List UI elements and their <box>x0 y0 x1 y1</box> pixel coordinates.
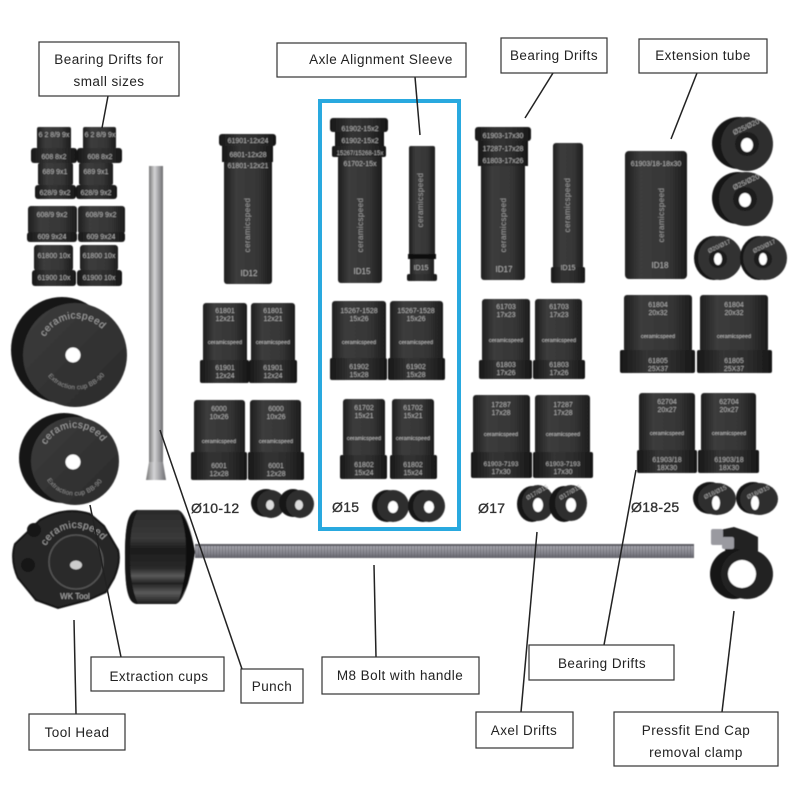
sleeve ID15: 61902-15x2 <box>342 126 379 133</box>
drift 61702 right: 61702 <box>403 405 423 412</box>
drift 61703 left: 61703 <box>496 304 516 311</box>
size label Ø17: Ø17 <box>478 500 505 516</box>
drift 6000 left: 6000 <box>211 406 227 413</box>
drift 61702 left <box>340 399 387 479</box>
small drift row 2 left <box>35 163 76 199</box>
sleeve ID12: ceramicspeed <box>243 198 252 252</box>
drift 62704 right: ceramicspeed <box>712 431 746 437</box>
callout: punch: Punch <box>252 679 292 694</box>
drift 15267 left: 15x28 <box>349 372 369 379</box>
sleeve ID17: ceramicspeed <box>499 198 508 252</box>
leader: axle alignment sleeve <box>415 77 420 135</box>
leader: pressfit clamp <box>722 611 734 712</box>
drift 17287 right: 17x28 <box>553 410 573 417</box>
small drift row 2 right <box>76 163 117 199</box>
small drift row 1 right: 608 8x2 <box>88 154 113 161</box>
drift 61801 left: 61801 <box>215 308 235 315</box>
drift 15267 right: 15x26 <box>406 316 426 323</box>
ring Ø25/Ø20 bottom: Ø25/Ø20 <box>732 173 761 192</box>
small drift row 3 right: 609 9x24 <box>87 234 116 241</box>
drift 61702 left: ceramicspeed <box>347 436 381 442</box>
sleeve ID12 <box>219 134 276 284</box>
drift 61801 right: ceramicspeed <box>256 340 290 346</box>
extension tube: 61903/18-18x30 <box>631 161 681 168</box>
drift 61801 right: 12x24 <box>263 373 283 380</box>
drift 61804 right: 25X37 <box>724 366 744 373</box>
sleeve ID15: 15267/15268-15x <box>337 151 383 157</box>
drift 17287 left: 17x30 <box>491 469 511 476</box>
drift 61804 left: 61804 <box>648 302 668 309</box>
drift 61804 left: 61805 <box>648 358 668 365</box>
drift 62704 right: 61903/18 <box>714 457 744 464</box>
drift 62704 right: 18X30 <box>719 465 739 472</box>
extraction cup large <box>10 296 128 408</box>
small drift row 4 right: 61900 10x <box>83 275 116 282</box>
small drift row 1 left: 6 2 8/9 9x <box>39 132 70 139</box>
drift 15267 right: ceramicspeed <box>399 340 433 346</box>
axle drift rings Ø17: Ø17/Ø15 <box>525 484 550 502</box>
callout: bearing drifts small sizes: small sizes <box>74 74 144 89</box>
leader: m8 bolt <box>374 565 376 657</box>
callout: punch <box>241 669 303 703</box>
callout: tool head: Tool Head <box>45 725 109 740</box>
sleeve ID15: ID15 <box>354 267 371 276</box>
axle drift rings Ø18-25: Ø18/Ø15 <box>746 485 771 501</box>
drift 61804 right: 20x32 <box>724 310 744 317</box>
drift 61801 left: 61901 <box>215 365 235 372</box>
drift 62704 left: 20x27 <box>657 407 677 414</box>
sleeve ID12: 6801-12x28 <box>230 152 267 159</box>
callout: bearing drifts small sizes: Bearing Drifts for <box>54 52 164 67</box>
callout: extraction cups: Extraction cups <box>109 669 209 684</box>
axle alignment sleeve tube <box>407 146 437 281</box>
sleeve ID15: 61702-15x <box>343 161 377 168</box>
drift 61703 right: 17x23 <box>549 312 569 319</box>
drift 61702 right: 15x24 <box>403 470 423 477</box>
small drift row 2 left: 689 9x1 <box>43 169 68 176</box>
sleeve ID15: ceramicspeed <box>356 198 365 252</box>
small drift row 2 right: 689 9x1 <box>84 169 109 176</box>
bolt handle <box>125 510 195 604</box>
drift 15267 right: 61902 <box>406 364 426 371</box>
drift 61703 left: 61803 <box>496 362 516 369</box>
tool head <box>11 503 136 610</box>
size label Ø18-25: Ø18-25 <box>631 499 680 515</box>
punch <box>146 166 166 480</box>
drift 61702 right: ceramicspeed <box>396 436 430 442</box>
spacer rings Ø25/Ø20 and Ø20/Ø17 <box>694 117 787 280</box>
ring Ø20/Ø17 right: Ø20/Ø17 <box>752 239 777 255</box>
drift 61801 right: 61801 <box>263 308 283 315</box>
axle alignment sleeve tube: ceramicspeed <box>416 173 425 227</box>
small drift row 4 left <box>32 245 76 286</box>
small drift row 4 left: 61900 10x <box>38 275 71 282</box>
tool head: WK Tool <box>60 592 90 601</box>
drift 15267 left: ceramicspeed <box>342 340 376 346</box>
drift 17287 right: ceramicspeed <box>546 432 580 438</box>
drift 62704 right: 20x27 <box>719 407 739 414</box>
tool head: ceramicspeed <box>42 520 108 546</box>
drift 15267 right: 15267-1528 <box>397 308 435 315</box>
drift 17287 left <box>471 395 532 478</box>
small drift row 3 right <box>78 206 125 242</box>
small drift row 1 left: 608 8x2 <box>42 154 67 161</box>
drift 61702 left: 15x24 <box>354 470 374 477</box>
callout: axel drifts <box>476 712 573 748</box>
small drift row 4 left: 61800 10x <box>38 253 71 260</box>
leader: extension tube <box>671 73 697 139</box>
drift 61801 right: 61901 <box>263 365 283 372</box>
axle drift rings Ø10-12 <box>251 489 314 518</box>
drift 61702 right: 61802 <box>403 462 423 469</box>
callout: bearing drifts bottom <box>529 645 674 680</box>
drift 61804 right <box>697 295 772 373</box>
drift 17287 right: 61903-7193 <box>546 461 581 468</box>
drift 61702 left: 61802 <box>354 462 374 469</box>
drift 61804 left: 20x32 <box>648 310 668 317</box>
drift 17287 left: 17x28 <box>491 410 511 417</box>
ring Ø25/Ø20 top <box>712 117 773 171</box>
extraction cup large: ceramicspeed <box>40 312 107 336</box>
ring Ø20/Ø17 right <box>740 236 787 280</box>
size label Ø15: Ø15 <box>332 499 359 515</box>
drift 61703 right <box>533 299 585 379</box>
drift 6000 right <box>248 400 304 480</box>
drift 62704 left: 62704 <box>657 399 677 406</box>
drift 15267 left: 15x26 <box>349 316 369 323</box>
small drift row 2 right: 628/9 9x2 <box>81 190 111 197</box>
drift 61804 left <box>620 295 695 373</box>
callout: axle alignment sleeve <box>277 43 466 77</box>
drift 62704 right: 62704 <box>719 399 739 406</box>
small drift row 3 left <box>27 206 77 242</box>
drift 61804 right: ceramicspeed <box>717 334 751 340</box>
small drift row 1 left <box>31 127 77 163</box>
axle alignment sleeve tube: ID15 <box>414 265 428 272</box>
small drift row 4 right: 61800 10x <box>83 253 116 260</box>
drift 6000 right: 6000 <box>268 406 284 413</box>
drift 61801 right <box>249 303 297 383</box>
drift 61804 right: 61804 <box>724 302 744 309</box>
drift 61801 left: ceramicspeed <box>208 340 242 346</box>
drift 15267 right <box>388 301 445 380</box>
small drift row 3 left: 609 9x24 <box>38 234 67 241</box>
small drift row 1 right <box>77 127 122 163</box>
drift 62704 right <box>698 393 759 473</box>
drift 17287 left: 17287 <box>491 402 511 409</box>
small drift row 3 left: 608/9 9x2 <box>37 212 67 219</box>
callout: axle alignment sleeve: Axle Alignment Sleeve <box>309 52 453 67</box>
m8 bolt thread <box>195 544 694 558</box>
axle drift rings Ø15 <box>372 490 445 522</box>
extraction cup small <box>18 412 120 506</box>
small drift row 4 right <box>77 245 122 286</box>
extension tube: ceramicspeed <box>657 188 666 242</box>
drift 61801 left: 12x21 <box>215 316 235 323</box>
drift 6000 left: ceramicspeed <box>202 439 236 445</box>
product illustrations layer <box>10 116 788 610</box>
drift 6000 right: ceramicspeed <box>259 439 293 445</box>
sleeve ID12: 61801-12x21 <box>228 163 269 170</box>
drift 17287 right <box>533 395 593 478</box>
drift 61804 left: ceramicspeed <box>641 334 675 340</box>
drift 61703 left <box>479 299 532 379</box>
drift 6000 right: 10x26 <box>266 414 286 421</box>
highlight frame: Ø15 group <box>320 101 459 529</box>
size label Ø10-12: Ø10-12 <box>191 500 240 516</box>
sleeve ID12: 61901-12x24 <box>228 138 269 145</box>
drift 15267 left: 61902 <box>349 364 369 371</box>
leader: punch <box>160 430 242 669</box>
drift 61703 right: 61703 <box>549 304 569 311</box>
drift 61702 left: 15x21 <box>354 413 374 420</box>
axle drift rings Ø18-25: Ø18/Ø15 <box>703 485 728 501</box>
drift 17287 left: ceramicspeed <box>484 432 518 438</box>
callout: extension tube <box>639 39 767 73</box>
drift 15267 right: 15x28 <box>406 372 426 379</box>
sleeve ID17: 61803-17x26 <box>483 158 524 165</box>
ring Ø25/Ø20 top: Ø25/Ø20 <box>732 118 761 137</box>
leader: axel drifts <box>521 532 537 712</box>
axle drift tube ID17: ceramicspeed <box>563 178 572 232</box>
leader: bearing drifts top <box>525 73 553 118</box>
drift 6000 left: 12x28 <box>209 471 229 478</box>
sleeve ID15: 61902-15x2 <box>342 138 379 145</box>
extraction cup small: ceramicspeed <box>42 420 108 444</box>
callout: m8 bolt <box>322 657 479 694</box>
drift 62704 left: 18X30 <box>657 465 677 472</box>
extension tube <box>625 151 687 279</box>
drift 61703 right: 61803 <box>549 362 569 369</box>
drift 61801 right: 12x21 <box>263 316 283 323</box>
drift 61703 left: 17x26 <box>496 370 516 377</box>
callout: bearing drifts small sizes <box>39 42 179 96</box>
drift 17287 left: 61903-7193 <box>484 461 519 468</box>
drift 6000 right: 6001 <box>268 463 284 470</box>
sleeve ID15 <box>330 118 388 283</box>
drift 62704 left: ceramicspeed <box>650 431 684 437</box>
callout: bearing drifts bottom: Bearing Drifts <box>558 656 646 671</box>
drift 61804 left: 25X37 <box>648 366 668 373</box>
extraction cup small: Extraction cup BB-904 <box>46 478 102 496</box>
extension tube: ID18 <box>652 261 669 270</box>
sleeve ID17: 17287-17x28 <box>483 146 524 153</box>
small drift row 3 right: 608/9 9x2 <box>86 212 116 219</box>
small drift row 2 left: 628/9 9x2 <box>40 190 70 197</box>
drift 61801 left <box>200 303 249 383</box>
ring Ø25/Ø20 bottom <box>712 172 773 226</box>
callout: pressfit end cap clamp <box>614 712 778 766</box>
leader: small sizes <box>102 96 108 128</box>
ring Ø20/Ø17 left: Ø20/Ø17 <box>707 239 732 255</box>
callout: extraction cups <box>91 657 224 691</box>
drift 61804 right: 61805 <box>724 358 744 365</box>
callout: bearing drifts top: Bearing Drifts <box>510 48 598 63</box>
drift 15267 left: 15267-1528 <box>340 308 378 315</box>
ring Ø20/Ø17 left <box>694 236 742 280</box>
callout: m8 bolt: M8 Bolt with handle <box>337 668 463 683</box>
sleeve ID17: 61903-17x30 <box>483 133 524 140</box>
leader: extraction cups <box>90 505 121 657</box>
callout: pressfit end cap clamp: removal clamp <box>649 745 743 760</box>
drift 61703 left: ceramicspeed <box>489 338 523 344</box>
drift 61703 right: 17x26 <box>549 370 569 377</box>
callout: tool head <box>29 714 125 750</box>
drift 6000 left: 6001 <box>211 463 227 470</box>
small drift row 1 right: 6 2 8/9 9x <box>85 132 116 139</box>
axle drift rings Ø17 <box>517 484 587 522</box>
sleeve ID12: ID12 <box>241 269 258 278</box>
callout: pressfit end cap clamp: Pressfit End Cap <box>642 723 750 738</box>
sleeve ID17 <box>475 127 531 280</box>
drift 62704 left: 61903/18 <box>652 457 682 464</box>
drift 61703 right: ceramicspeed <box>542 338 576 344</box>
pressfit end cap clamp <box>710 527 773 599</box>
drift 62704 left <box>637 393 697 473</box>
small bearing drifts group <box>27 127 125 286</box>
axle drift rings Ø18-25 <box>693 482 778 515</box>
drift 61801 left: 12x24 <box>215 373 235 380</box>
drift 61702 left: 61702 <box>354 405 374 412</box>
drift 17287 right: 17287 <box>553 402 573 409</box>
leader: bearing drifts bottom <box>604 470 636 645</box>
drift 6000 left: 10x26 <box>209 414 229 421</box>
drift 61702 right: 15x21 <box>403 413 423 420</box>
callout: extension tube: Extension tube <box>655 48 751 63</box>
axle drift tube ID17: ID15 <box>561 265 575 272</box>
drift 6000 left <box>191 400 247 480</box>
drift 61703 left: 17x23 <box>496 312 516 319</box>
drift 17287 right: 17x30 <box>553 469 573 476</box>
axle drift tube ID17 <box>551 143 585 283</box>
drift 61702 right <box>390 399 437 479</box>
drift 15267 left <box>330 301 387 380</box>
drift 6000 right: 12x28 <box>266 471 286 478</box>
axle drift rings Ø17: Ø17/Ø15 <box>558 484 583 502</box>
callout: axel drifts: Axel Drifts <box>491 723 557 738</box>
sleeve ID17: ID17 <box>496 265 513 274</box>
leader: tool head <box>74 620 76 714</box>
callout: bearing drifts top <box>501 38 607 73</box>
